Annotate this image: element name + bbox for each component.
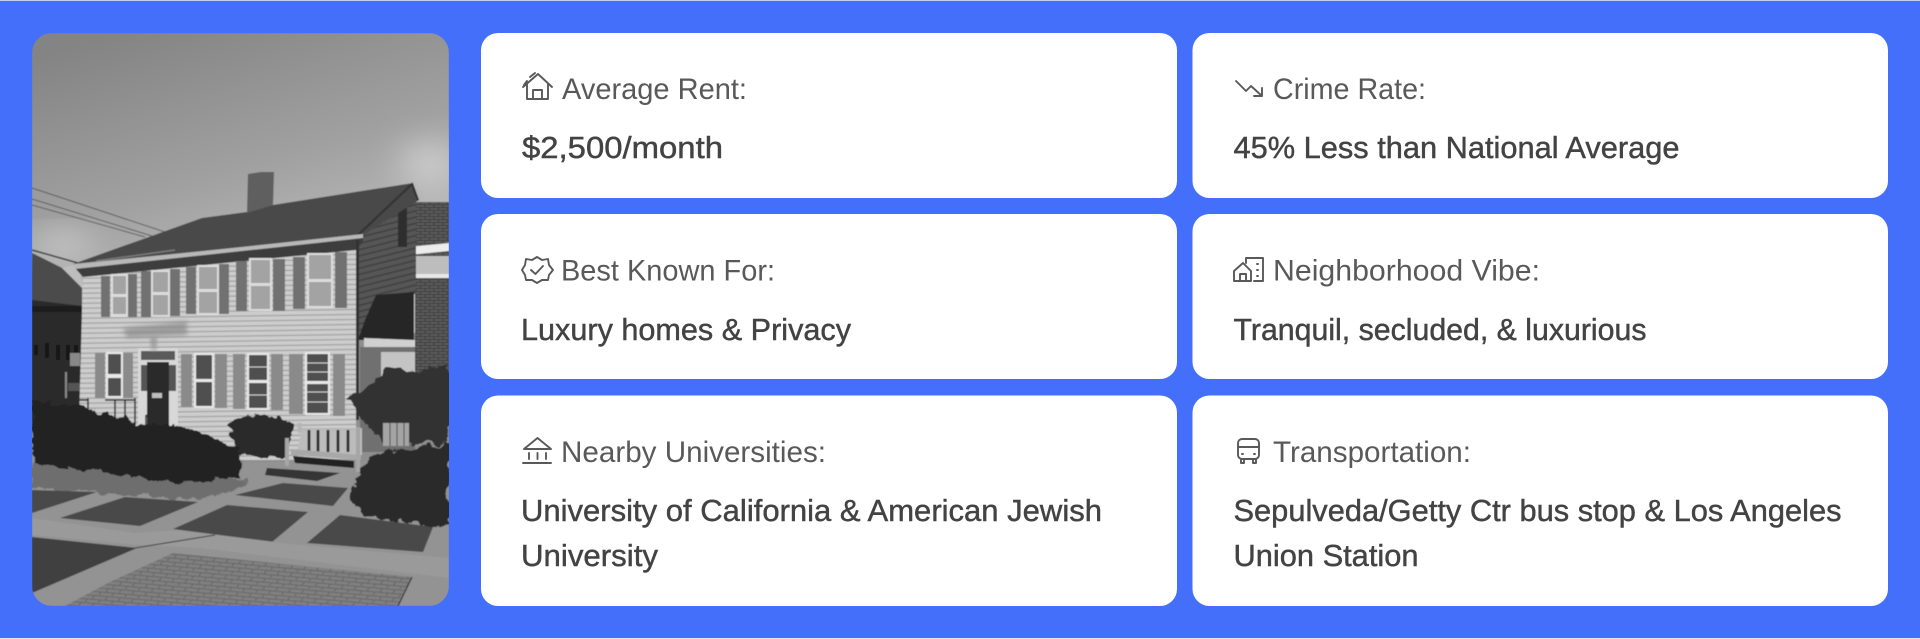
value: best known for: Luxury homes & Privacy bbox=[521, 312, 851, 347]
upper shutters bbox=[101, 252, 347, 317]
icon: house bbox=[523, 73, 552, 99]
icon: verified badge bbox=[522, 257, 553, 283]
bench bbox=[297, 423, 362, 433]
label: best known for: Best Known For: bbox=[561, 254, 775, 288]
shrubs bbox=[32, 363, 449, 527]
neighbouring building bbox=[32, 299, 82, 420]
wall shadow bbox=[123, 321, 187, 338]
photo base bbox=[32, 332, 449, 463]
door bbox=[138, 348, 178, 428]
card: nearby universities: University bbox=[521, 538, 658, 573]
front wall bbox=[78, 240, 356, 460]
gravel bbox=[32, 463, 247, 500]
label: neighborhood vibe: Neighborhood Vibe: bbox=[1273, 254, 1540, 288]
photo: house bbox=[28, 33, 460, 606]
label: average rent: Average Rent: bbox=[562, 73, 747, 106]
label: transportation: Transportation: bbox=[1273, 436, 1471, 469]
label: nearby universities: Nearby Universities: bbox=[561, 436, 826, 469]
card: transportation: Union Station bbox=[1234, 538, 1418, 573]
chimney bbox=[247, 172, 274, 213]
icon: trend down bbox=[1236, 81, 1262, 96]
power lines bbox=[32, 188, 165, 237]
brick paving bbox=[65, 553, 412, 606]
roof bbox=[73, 183, 419, 264]
lower shutters bbox=[95, 353, 345, 416]
value: crime rate: 45% Less than National Average bbox=[1234, 130, 1680, 165]
label: crime rate: Crime Rate: bbox=[1273, 73, 1426, 106]
lawn patches bbox=[32, 483, 433, 593]
curb bbox=[216, 534, 273, 543]
upper windows bbox=[111, 253, 333, 317]
card: transportation bbox=[1192, 396, 1888, 606]
value: transportation: Sepulveda/Getty Ctr bus stop & Los Angeles bbox=[1234, 493, 1842, 528]
side wall bbox=[357, 190, 416, 340]
sky bbox=[32, 33, 449, 333]
card: neighborhood vibe bbox=[1192, 214, 1888, 379]
card: average rent bbox=[481, 33, 1177, 198]
card: nearby universities bbox=[481, 396, 1177, 606]
icon: university building bbox=[523, 438, 551, 463]
value: neighborhood vibe: Tranquil, secluded, & luxurious bbox=[1234, 312, 1646, 347]
brick tower bbox=[415, 202, 449, 377]
railing bbox=[78, 398, 148, 426]
card: crime rate bbox=[1192, 33, 1888, 198]
icon: bus bbox=[1238, 439, 1259, 463]
icon: house and building bbox=[1234, 258, 1263, 281]
lower windows bbox=[106, 352, 330, 415]
card: best known for bbox=[481, 214, 1177, 379]
value: nearby universities: University of California & American Jewish bbox=[521, 493, 1102, 528]
ground bbox=[32, 462, 449, 606]
fence bbox=[383, 423, 409, 446]
value: average rent: $2,500/month bbox=[522, 130, 723, 165]
